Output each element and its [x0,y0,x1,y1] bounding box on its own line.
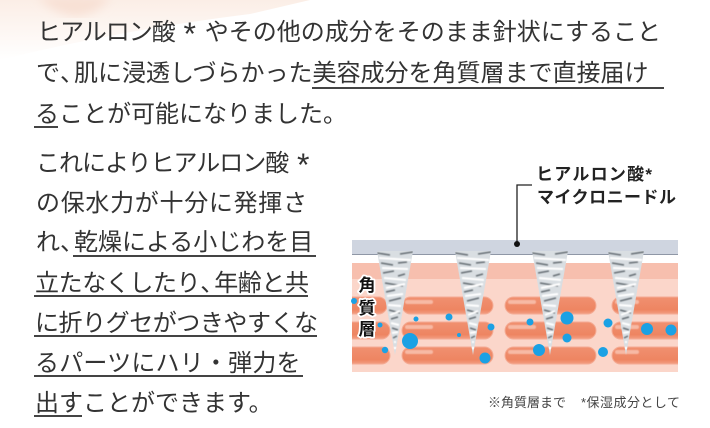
label: stratum corneum: 質 [358,299,376,318]
needle 3 [532,251,568,355]
diagram: microneedles in skin [351,165,678,408]
needle 2 [455,251,491,355]
text block: benefits paragraph: れ、乾燥による小じわを目 [36,229,313,256]
needle 4 [608,251,644,355]
label: microneedle name: ヒアルロン酸* [536,165,652,184]
skin layers [352,240,678,372]
text block: benefits paragraph: の保水力が十分に発揮さ [36,190,308,217]
label: stratum corneum: 角 [358,275,376,295]
label: stratum corneum: 層 [358,320,376,339]
text block: benefits paragraph: に折りグセがつきやすくな [35,310,318,337]
text block: intro paragraph [34,16,664,128]
needle 1 [377,251,413,355]
label: microneedle name [536,165,676,207]
text block: benefits paragraph: * [297,147,310,183]
text block: intro paragraph: で、肌に浸透しづらかった美容成分を角質層まで直接届け [36,60,649,87]
background: soft skin tone at top [0,0,310,40]
text block: intro paragraph: ることが可能になりました。 [35,101,347,128]
text block: benefits paragraph [34,147,318,417]
label: microneedle name: マイクロニードル [537,188,676,207]
blue hyaluronic acid dots [351,298,676,364]
leader line [514,185,532,247]
text block: benefits paragraph: るパーツにハリ・弾力を [35,350,301,377]
text block: benefits paragraph: 出すことができます。 [35,390,273,417]
footnote: ※角質層まで [488,395,566,410]
text block: intro paragraph: ヒアルロン酸 やその他の成分をそのまま針状にすること [37,19,661,46]
muscle capsules [340,297,692,364]
text block: benefits paragraph: 立たなくしたり、年齢と共 [35,270,309,297]
text block: benefits paragraph: これによりヒアルロン酸 [36,150,288,177]
label: stratum corneum [358,275,376,339]
text block: intro paragraph: * [184,16,196,52]
footnote: moisturizing ingredient: *保湿成分として [581,395,680,410]
